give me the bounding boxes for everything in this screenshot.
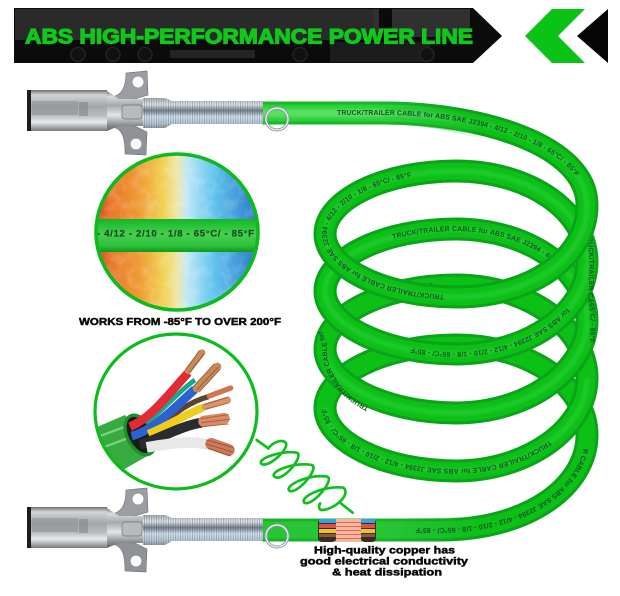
title banner xyxy=(14,8,502,63)
black wire xyxy=(140,423,202,445)
top front turn: TRUCK/TRAILER CABLE for ABS SAE J2394 - 4/12 - 2/10 - 1/8 - 65°C/ - 85°F xyxy=(322,172,444,300)
cable band xyxy=(93,219,261,252)
white wire xyxy=(147,442,208,447)
circle outline xyxy=(96,154,258,310)
coil connector squiggle xyxy=(257,440,353,513)
back of coil turns: · - 65°C/ - 85°F xyxy=(428,283,432,284)
back of coil turns: TRUCK/TRAILER CABLE for ABS SAE J2394 - 4/12 - xyxy=(392,226,552,258)
blue wire xyxy=(132,389,195,436)
fourth front turn: TRUCK/TRAILER CABLE for ABS SAE J2394 - 4/12 - 2/10 - 1/8 - 65°C/ - 85°F xyxy=(322,409,552,474)
banner arrow shape xyxy=(14,8,502,63)
second front turn: for ABS SAE J2394 - 4/12 - 2/10 - 1/8 - 65°C/ - 85°F xyxy=(410,308,570,357)
wires and jacket xyxy=(90,351,233,472)
temperature caption: WORKS FROM -85°F TO OVER 200°F xyxy=(79,316,282,328)
third front turn xyxy=(314,303,598,424)
back of coil turns xyxy=(314,160,598,435)
yellow wire xyxy=(148,408,203,434)
temperature range circle xyxy=(93,150,261,315)
copper caption: good electrical conductivity xyxy=(300,556,468,568)
bottom straight cable run xyxy=(262,448,588,542)
top cable ring xyxy=(266,108,288,130)
top straight cable run: TRUCK/TRAILER CABLE for ABS SAE J2394 - 4/12 - 2/10 - 1/8 - 65°C/ - 85°F xyxy=(337,110,580,176)
top straight cable run xyxy=(262,102,580,176)
top front turn xyxy=(314,102,598,308)
bottom cable ring xyxy=(266,525,288,547)
final turn into bottom run xyxy=(265,435,587,530)
cable cross-section circle xyxy=(90,334,257,489)
third front turn: 65°C/ - 85°F xyxy=(589,303,596,343)
bottom straight cable run: R CABLE for ABS SAE J2394 - 4/12 - 2/10 - 1/8 - 65°C/ - 85°F xyxy=(416,448,588,534)
red wire xyxy=(130,373,188,427)
black chevron xyxy=(577,9,608,63)
green jacket xyxy=(98,415,155,470)
truck silhouette xyxy=(15,9,470,62)
exposed copper cable section xyxy=(318,519,376,542)
copper caption: & heat dissipation xyxy=(332,566,442,578)
green chevron xyxy=(525,9,585,63)
circle outline xyxy=(95,334,257,489)
bottom connector plug with spring xyxy=(27,488,263,572)
brown wire xyxy=(166,394,209,422)
teal wire xyxy=(147,380,195,423)
copper caption: High-quality copper has xyxy=(314,544,455,556)
third front turn: TRUCK/TRAILER CABLE for ABS xyxy=(318,332,368,412)
second front turn xyxy=(314,238,598,366)
chevron icon xyxy=(525,9,608,63)
fourth front turn xyxy=(314,378,598,482)
copper caption xyxy=(300,544,468,578)
copper strands xyxy=(186,351,233,456)
banner title text: ABS HIGH-PERFORMANCE POWER LINE xyxy=(25,24,473,48)
top connector plug with spring xyxy=(27,71,263,155)
second front turn: TRUCK/TRAILER CABLE for xyxy=(588,238,594,302)
hot to cold texture xyxy=(99,156,255,308)
cable band text: - 4/12 - 2/10 - 1/8 - 65°C/ - 85°F xyxy=(97,228,254,240)
